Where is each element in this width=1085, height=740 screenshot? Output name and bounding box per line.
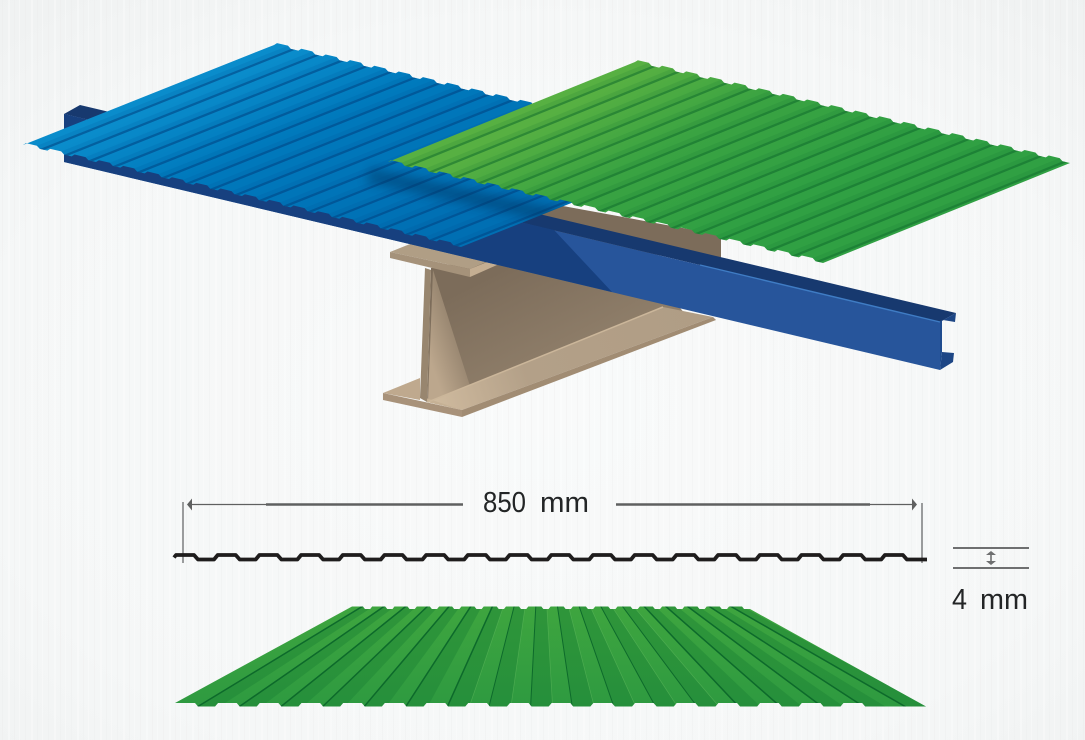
thickness label: 4 (952, 584, 967, 616)
lower sheet highlight lines (469, 606, 719, 707)
lower sheet centre groove lines (489, 606, 697, 707)
purlin end lips (940, 313, 956, 370)
I-beam bottom flange (383, 307, 716, 417)
I-beam rear web (530, 200, 721, 265)
I-beam web light wedge (428, 270, 470, 402)
left dimension arrow (183, 498, 463, 563)
I-beam top flange (390, 232, 497, 277)
dimension label: mm (540, 487, 589, 519)
thickness label: mm (980, 584, 1028, 616)
thickness dimension: 4 mm (952, 548, 1029, 616)
steel I-beam (383, 200, 721, 417)
right dimension arrow (616, 498, 922, 563)
purlin web (64, 114, 940, 370)
dimension label: 850 (483, 487, 526, 519)
blue sheet ribs (38, 46, 570, 246)
I-beam web (427, 235, 690, 402)
lower sheet dark bands (197, 606, 928, 707)
thickness lines and arrow (953, 548, 1029, 568)
blue C-purlin (64, 105, 956, 370)
I-beam web end (420, 268, 431, 402)
width dimension: 850 mm (183, 487, 922, 563)
purlin shaded web (64, 114, 612, 292)
blue sheet base (24, 43, 572, 247)
purlin top flange (64, 105, 956, 322)
lower sheet outer groove lines (197, 606, 906, 707)
shadow cast by green sheet (365, 168, 570, 222)
lower sheet base (175, 606, 926, 706)
green sheet base (385, 55, 1075, 270)
blue corrugated sheet (24, 43, 572, 247)
green sheet ribs (402, 63, 1067, 262)
green corrugated sheet (388, 60, 1070, 263)
lower green sheet (175, 606, 926, 706)
black sheet cross-section profile (174, 555, 927, 560)
purlin highlight line (700, 265, 940, 322)
